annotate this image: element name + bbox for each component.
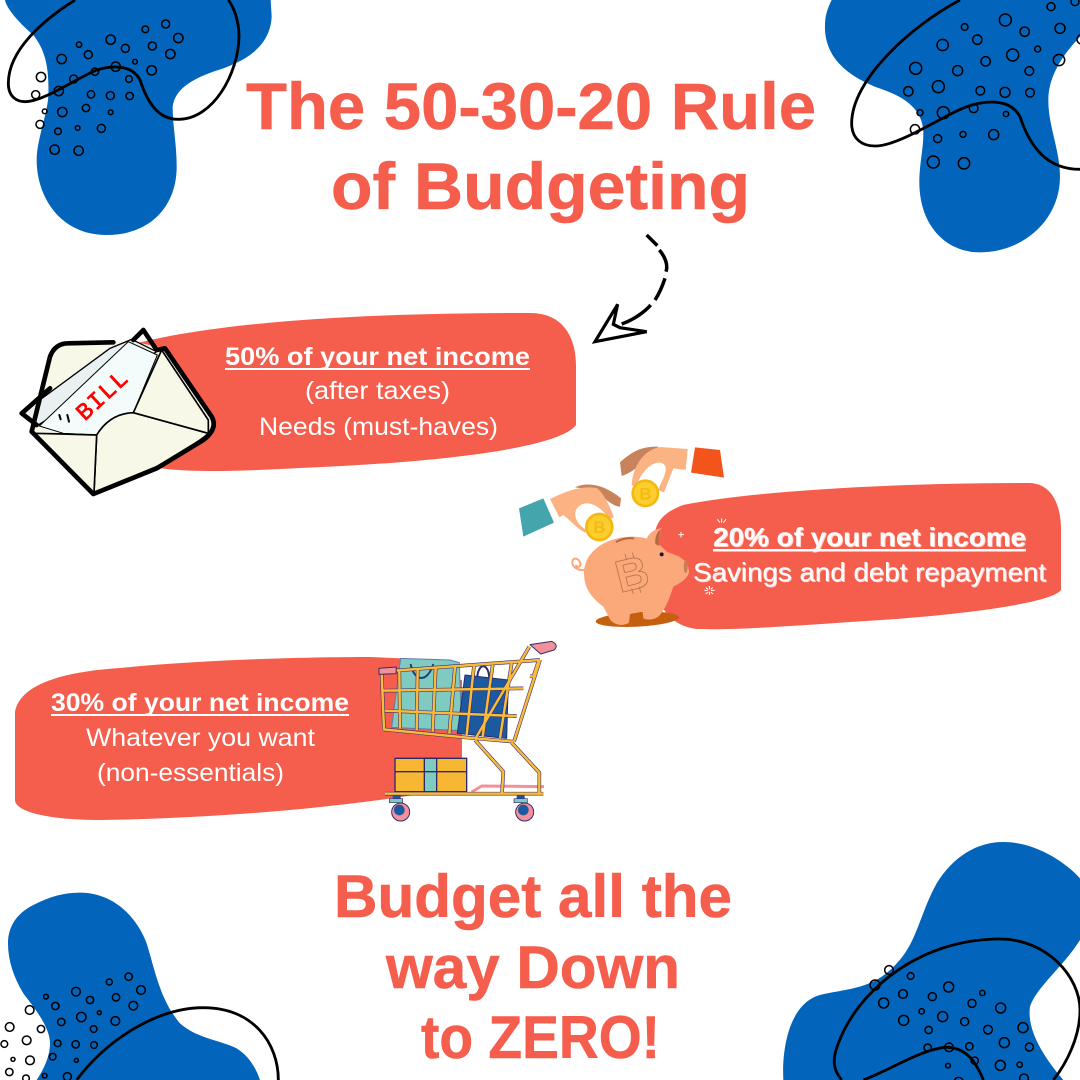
text: savings and debt repayment: Savings and debt repayment	[694, 558, 1048, 588]
pig shadow	[595, 610, 679, 629]
decoration: bottom-right blob	[783, 842, 1080, 1080]
closing message	[334, 863, 732, 1071]
closing message: Budget all the	[334, 863, 732, 930]
heading: 50%: 50% of your net income	[225, 343, 530, 371]
title	[246, 69, 816, 223]
heading: 30%: 30% of your net income	[51, 689, 349, 717]
decoration: bottom-left blob	[1, 893, 278, 1080]
cart frame	[380, 647, 544, 794]
gift box	[395, 758, 467, 792]
text: savings and debt repayment: Savings and debt repayment	[693, 557, 1047, 587]
cart corner cap	[379, 667, 396, 674]
icon: bill in envelope: BILL	[72, 366, 135, 428]
pig tail	[572, 559, 585, 570]
text: whatever you want: Whatever you want	[86, 724, 315, 752]
coin slot	[617, 538, 633, 542]
text: non-essentials: (non-essentials)	[97, 759, 284, 787]
arrow: dashed curve pointing to first panel	[595, 235, 667, 342]
heading: 20%: 20% of your net income	[713, 522, 1026, 552]
left coin: B	[593, 518, 605, 537]
panel background	[130, 313, 576, 471]
pig body	[584, 537, 689, 625]
panel: 50 percent needs	[130, 313, 576, 471]
panel background	[15, 657, 462, 820]
closing message: to ZERO!	[421, 1004, 660, 1071]
closing message: way Down	[385, 934, 680, 1001]
right hand	[620, 447, 658, 476]
icon: bill in envelope	[22, 330, 214, 494]
text: after taxes: (after taxes)	[305, 377, 450, 405]
right coin: B	[639, 484, 651, 503]
bitcoin mark: B	[610, 545, 654, 603]
left wheel	[389, 795, 410, 821]
blue bag	[457, 666, 508, 738]
text: needs: Needs (must-haves)	[259, 413, 498, 441]
decoration: top-right blob	[825, 0, 1080, 252]
sparkles	[678, 518, 726, 595]
teal bag	[392, 658, 462, 731]
panel background	[653, 483, 1061, 629]
icon: shopping cart	[379, 641, 556, 821]
title: of Budgeting	[331, 149, 750, 223]
left coin	[585, 513, 614, 541]
left sleeve	[519, 498, 554, 537]
icon: piggy bank and hands with coins	[519, 447, 726, 629]
panel: 30 percent wants	[15, 657, 462, 820]
right sleeve	[691, 447, 724, 478]
snout	[684, 560, 688, 573]
title: The 50-30-20 Rule	[246, 69, 816, 143]
heading: 20%: 20% of your net income	[714, 523, 1027, 553]
right coin	[631, 479, 659, 507]
cart handle	[530, 641, 556, 654]
decoration: top-left blob	[5, 0, 272, 235]
eye	[660, 552, 664, 556]
left hand	[575, 485, 621, 507]
panel: 20 percent savings	[653, 483, 1061, 629]
right wheel	[514, 795, 534, 821]
pig ear	[647, 528, 662, 546]
